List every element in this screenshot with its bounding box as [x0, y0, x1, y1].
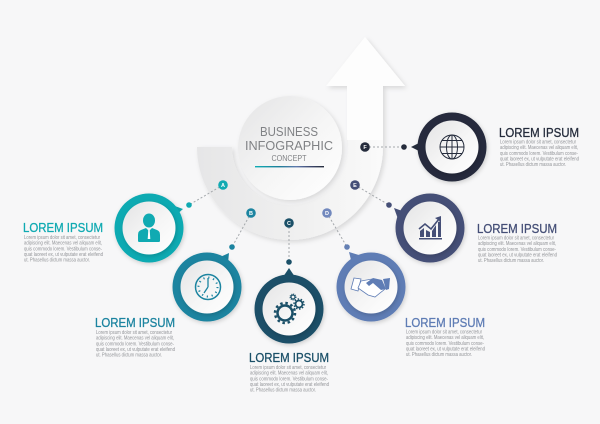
text block A: quat laoreet ex, ut vulputate erat eleifend — [24, 252, 103, 258]
text block C: ut. Phasellus dictum massa auctor. — [250, 388, 316, 394]
text block C: quis commodo lorem. Vestibulum conse- — [250, 376, 328, 382]
connector C — [284, 218, 294, 265]
icon: globe — [440, 135, 464, 159]
text block E: adipiscing elit. Maecenas vel aliquam elit, — [478, 241, 556, 247]
icon: chart — [419, 216, 442, 240]
text block D: LOREM IPSUM — [405, 315, 485, 330]
text block F: adipiscing elit. Maecenas vel aliquam elit, — [500, 145, 578, 151]
centre disc with title — [238, 96, 342, 200]
text block D — [405, 315, 485, 358]
text block B: Lorem ipsum dolor sit amet, consectetur — [96, 330, 172, 336]
icon: handshake — [351, 278, 390, 297]
text block E: quis commodo lorem. Vestibulum conse- — [478, 247, 556, 253]
text block D: ut. Phasellus dictum massa auctor. — [406, 352, 472, 358]
text block E: quat laoreet ex, ut vulputate erat eleifend — [478, 252, 557, 258]
title: INFOGRAPHIC — [245, 138, 333, 153]
title rule — [255, 166, 324, 167]
connector D: D — [325, 211, 329, 217]
text block D: quis commodo lorem. Vestibulum conse- — [406, 341, 484, 347]
title: CONCEPT — [272, 154, 307, 163]
text block B — [95, 315, 175, 359]
text block A: adipiscing elit. Maecenas vel aliquam elit, — [24, 241, 102, 247]
connector E — [350, 180, 392, 208]
text block E: Lorem ipsum dolor sit amet, consectetur — [478, 236, 554, 242]
text block C: quat laoreet ex, ut vulputate erat eleifend — [250, 382, 329, 388]
connector A: A — [221, 183, 225, 189]
text block B: adipiscing elit. Maecenas vel aliquam elit, — [96, 336, 174, 342]
icon: clock — [196, 274, 220, 300]
text block B: ut. Phasellus dictum massa auctor. — [96, 353, 162, 359]
text block C — [249, 350, 329, 394]
text block F: quis commodo lorem. Vestibulum conse- — [500, 151, 578, 157]
text block C: Lorem ipsum dolor sit amet, consectetur — [250, 365, 326, 371]
text block B: quat laoreet ex, ut vulputate erat eleifend — [96, 347, 175, 353]
icon: gears — [275, 294, 304, 323]
connector B — [229, 208, 256, 250]
text block E: ut. Phasellus dictum massa auctor. — [478, 258, 544, 264]
text block A — [23, 220, 103, 264]
text block C: adipiscing elit. Maecenas vel aliquam elit, — [250, 371, 328, 377]
connector D — [322, 208, 350, 250]
title — [245, 124, 333, 163]
text block A: quis commodo lorem. Vestibulum conse- — [24, 246, 102, 252]
text block E: LOREM IPSUM — [477, 221, 557, 236]
curved arrow — [197, 37, 405, 240]
text block A: ut. Phasellus dictum massa auctor. — [24, 258, 90, 264]
text block D: adipiscing elit. Maecenas vel aliquam elit, — [406, 335, 484, 341]
text block A: LOREM IPSUM — [23, 220, 103, 235]
connector B: B — [249, 211, 253, 217]
text block B: quis commodo lorem. Vestibulum conse- — [96, 341, 174, 347]
text block B: LOREM IPSUM — [95, 315, 175, 330]
text block F: quat laoreet ex, ut vulputate erat eleifend — [500, 156, 579, 162]
node A: person icon — [114, 194, 184, 262]
text block C: LOREM IPSUM — [249, 350, 329, 365]
connector E: E — [353, 183, 357, 189]
text block F: Lorem ipsum dolor sit amet, consectetur — [500, 140, 576, 146]
text block D: quat laoreet ex, ut vulputate erat eleifend — [406, 346, 485, 352]
icon: person — [138, 214, 160, 242]
node E: growth chart icon — [394, 194, 464, 262]
title: BUSINESS — [260, 124, 318, 139]
text block F — [499, 125, 579, 168]
node C: gears icon — [254, 268, 324, 344]
connector C: C — [287, 221, 291, 227]
text block A: Lorem ipsum dolor sit amet, consectetur — [24, 235, 100, 241]
node F: globe icon — [411, 112, 486, 182]
connector A — [186, 180, 228, 208]
connector F — [360, 142, 407, 152]
text block E — [477, 221, 557, 264]
node B: clock icon — [172, 252, 242, 322]
text block F: ut. Phasellus dictum massa auctor. — [500, 162, 566, 168]
node D: handshake icon — [336, 252, 406, 322]
text block F: LOREM IPSUM — [499, 125, 579, 140]
text block D: Lorem ipsum dolor sit amet, consectetur — [406, 330, 482, 336]
connector F: F — [363, 145, 367, 151]
